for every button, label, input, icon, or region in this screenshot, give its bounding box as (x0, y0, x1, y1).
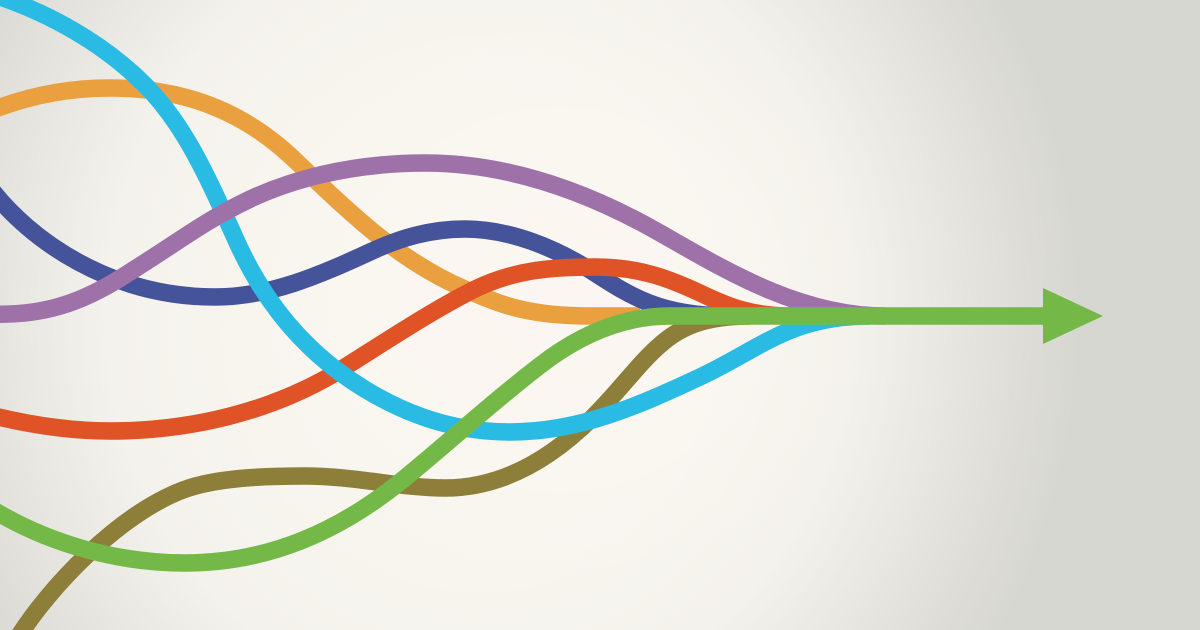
arrow: green line with arrowhead (0, 288, 1103, 563)
line: red-orange (0, 267, 790, 431)
line: orange (0, 88, 640, 316)
line: navy (0, 188, 730, 316)
line: purple (0, 163, 885, 316)
line: olive (15, 316, 750, 630)
line: cyan (0, 0, 870, 432)
